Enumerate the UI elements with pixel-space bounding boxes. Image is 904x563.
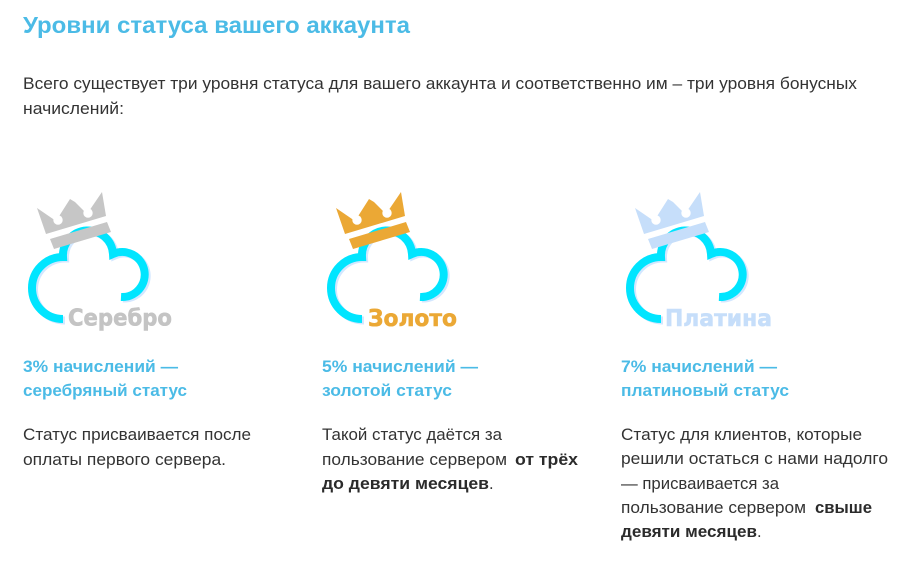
intro text bbox=[23, 75, 858, 118]
description: silver: оплаты первого сервера. bbox=[23, 451, 226, 469]
panel: silver status bbox=[23, 192, 251, 469]
heading: gold: 5% начислений — bbox=[322, 358, 479, 376]
description: platinum bbox=[621, 426, 888, 541]
icon: silver crown and cloud bbox=[32, 192, 172, 332]
description: silver bbox=[23, 426, 251, 469]
icon: platinum crown and cloud bbox=[630, 192, 772, 332]
heading: silver: серебряный статус bbox=[23, 382, 187, 400]
description: gold: до девяти месяцев bbox=[322, 475, 489, 493]
heading: silver: 3% начислений — bbox=[23, 358, 179, 376]
icon: platinum crown and cloud: Платина bbox=[665, 306, 772, 332]
description: platinum: свыше bbox=[815, 499, 872, 517]
heading: gold bbox=[322, 358, 479, 400]
description: gold: . bbox=[489, 475, 494, 493]
description: gold: пользование сервером bbox=[322, 451, 507, 469]
heading: platinum bbox=[621, 358, 789, 400]
description: platinum: — присваивается за bbox=[621, 475, 780, 493]
heading: silver bbox=[23, 358, 187, 400]
heading: platinum: 7% начислений — bbox=[621, 358, 778, 376]
description: platinum: . bbox=[757, 523, 762, 541]
description: silver: Статус присваивается после bbox=[23, 426, 251, 444]
description: platinum: Статус для клиентов, которые bbox=[621, 426, 862, 444]
heading: platinum: платиновый статус bbox=[621, 382, 789, 400]
icon: gold crown and cloud bbox=[331, 192, 457, 332]
panel: platinum status bbox=[621, 192, 888, 541]
description: platinum: девяти месяцев bbox=[621, 523, 757, 541]
description: gold bbox=[322, 426, 579, 493]
description: platinum: пользование сервером bbox=[621, 499, 806, 517]
heading: gold: золотой статус bbox=[322, 382, 452, 400]
icon: gold crown and cloud: Золото bbox=[368, 306, 457, 332]
panel: gold status bbox=[322, 192, 579, 493]
description: gold: от трёх bbox=[515, 451, 579, 469]
intro text: начислений: bbox=[23, 100, 124, 118]
description: gold: Такой статус даётся за bbox=[322, 426, 503, 444]
title: Уровни статуса вашего аккаунта bbox=[23, 12, 410, 38]
icon: silver crown and cloud: Серебро bbox=[68, 306, 172, 332]
intro text: Всего существует три уровня статуса для вашего аккаунта и соответственно им – три уровня бонусных bbox=[23, 75, 858, 93]
description: platinum: решили остаться с нами надолго bbox=[621, 450, 888, 468]
